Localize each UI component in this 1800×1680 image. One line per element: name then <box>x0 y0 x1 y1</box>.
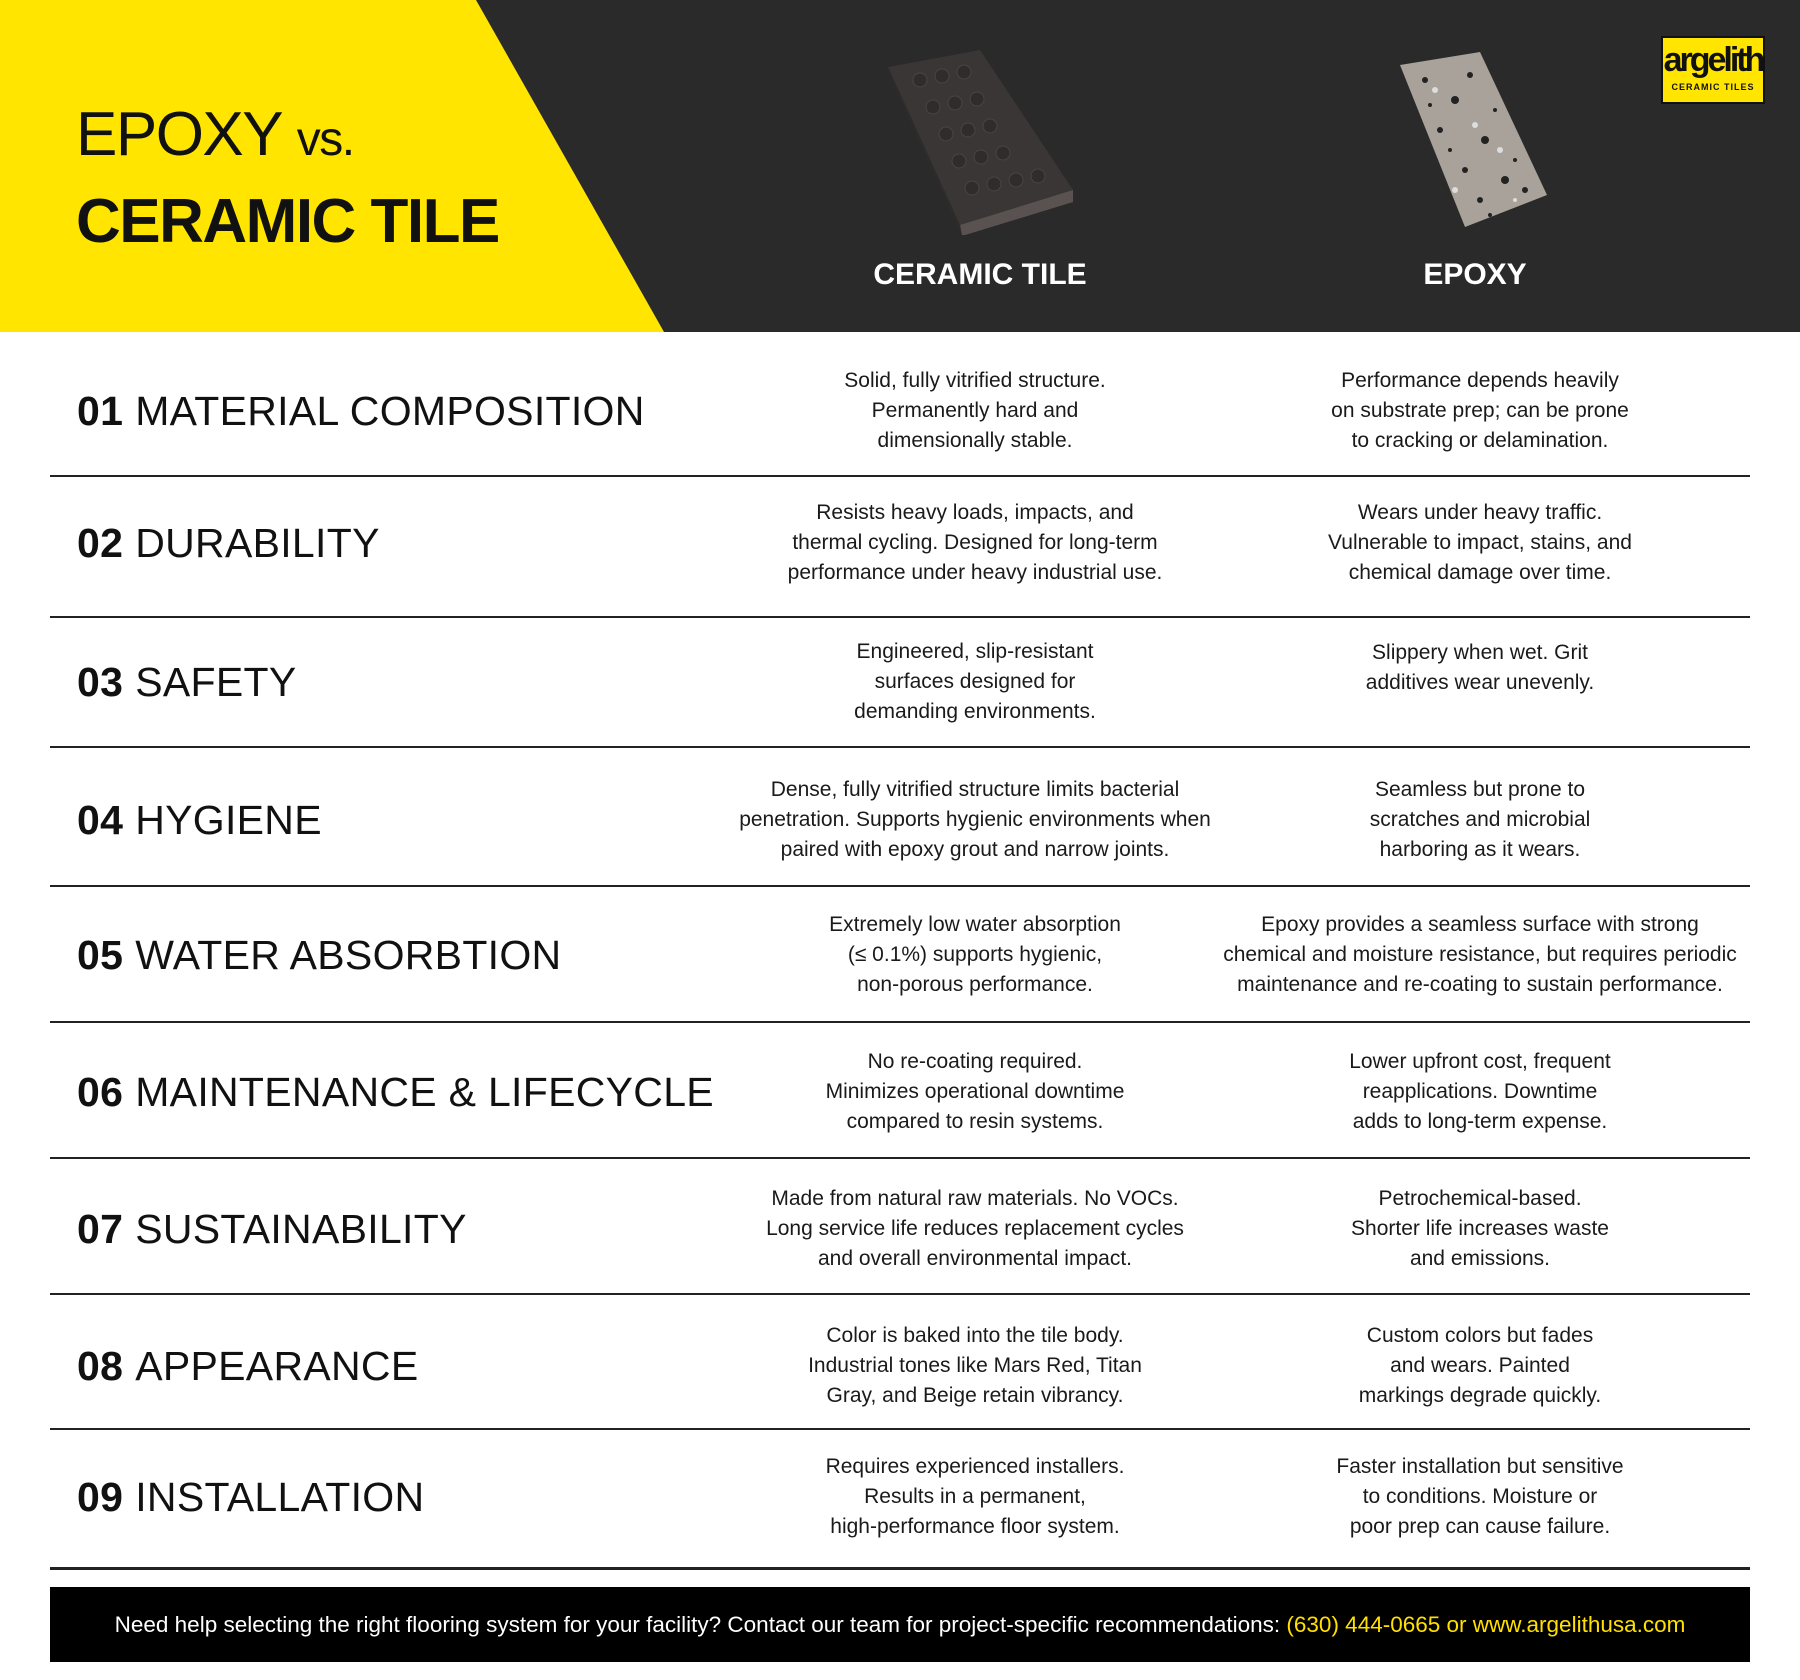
row 04: scratches and microbial <box>1370 808 1590 831</box>
row 07: SUSTAINABILITY <box>135 1206 467 1252</box>
row 06: compared to resin systems. <box>847 1110 1103 1133</box>
row 01: dimensionally stable. <box>878 429 1072 452</box>
row 09: Results in a permanent, <box>864 1485 1086 1508</box>
row 09: Requires experienced installers. <box>826 1455 1124 1478</box>
row 06: Lower upfront cost, frequent <box>1349 1050 1611 1073</box>
row 07 <box>77 1187 1609 1270</box>
row 09: high-performance floor system. <box>830 1515 1120 1538</box>
row 02: performance under heavy industrial use. <box>788 561 1162 584</box>
row 06: MAINTENANCE & LIFECYCLE <box>135 1068 714 1114</box>
title <box>76 100 499 256</box>
row 06: adds to long-term expense. <box>1353 1110 1607 1133</box>
row 03: Engineered, slip-resistant <box>857 640 1093 663</box>
row 03: Slippery when wet. Grit <box>1372 641 1588 664</box>
row 07: 07 <box>77 1206 123 1252</box>
row 09: INSTALLATION <box>135 1474 424 1520</box>
title: EPOXY vs. <box>76 100 354 169</box>
row 05: 05 <box>77 932 123 978</box>
row 09 <box>77 1455 1624 1538</box>
row 01: MATERIAL COMPOSITION <box>135 388 645 434</box>
row 05: non-porous performance. <box>857 973 1093 996</box>
row 06: reapplications. Downtime <box>1363 1080 1597 1103</box>
row 09: Faster installation but sensitive <box>1336 1455 1624 1478</box>
row 01: Performance depends heavily <box>1341 369 1619 392</box>
row 02: Resists heavy loads, impacts, and <box>816 501 1134 524</box>
row 09: 09 <box>77 1474 123 1520</box>
row 03 <box>77 640 1594 723</box>
row 02: chemical damage over time. <box>1349 561 1611 584</box>
row 06: No re-coating required. <box>868 1050 1082 1073</box>
row 04: HYGIENE <box>135 796 322 842</box>
row 01: to cracking or delamination. <box>1352 429 1608 452</box>
row 02: Wears under heavy traffic. <box>1358 501 1602 524</box>
row 07: Long service life reduces replacement cycles <box>766 1217 1184 1240</box>
row 04: Dense, fully vitrified structure limits bacterial <box>771 778 1179 801</box>
row 05: (≤ 0.1%) supports hygienic, <box>848 943 1102 966</box>
row 01: 01 <box>77 388 123 434</box>
row 03: SAFETY <box>135 658 296 704</box>
row 03: additives wear unevenly. <box>1366 671 1594 694</box>
row 04 <box>77 778 1590 861</box>
row 09: poor prep can cause failure. <box>1350 1515 1610 1538</box>
row 01: on substrate prep; can be prone <box>1331 399 1629 422</box>
row 09: to conditions. Moisture or <box>1363 1485 1597 1508</box>
icon: ceramic tile image <box>888 50 1073 235</box>
row 07: Petrochemical-based. <box>1378 1187 1582 1210</box>
row 01: Permanently hard and <box>872 399 1078 422</box>
row 03: 03 <box>77 658 123 704</box>
column heading: epoxy: EPOXY <box>1423 258 1527 291</box>
row 02: DURABILITY <box>135 520 380 566</box>
row 08: Industrial tones like Mars Red, Titan <box>808 1354 1142 1377</box>
row 05: WATER ABSORBTION <box>135 932 561 978</box>
row 05: maintenance and re-coating to sustain performance. <box>1237 973 1723 996</box>
row 06: 06 <box>77 1068 123 1114</box>
column heading: ceramic tile: CERAMIC TILE <box>873 258 1087 291</box>
row 08: Gray, and Beige retain vibrancy. <box>827 1384 1123 1407</box>
row 02: thermal cycling. Designed for long-term <box>792 531 1158 554</box>
row 04: paired with epoxy grout and narrow joints. <box>781 838 1169 861</box>
row 04: penetration. Supports hygienic environments when <box>739 808 1211 831</box>
row 05: chemical and moisture resistance, but requires periodic <box>1223 943 1737 966</box>
row 06: Minimizes operational downtime <box>826 1080 1124 1103</box>
footer callout: (630) 444-0665 or www.argelithusa.com <box>1286 1612 1685 1636</box>
row 03: demanding environments. <box>854 700 1096 723</box>
row 03: surfaces designed for <box>875 670 1075 693</box>
header yellow wedge <box>0 0 664 332</box>
row 08: 08 <box>77 1342 123 1388</box>
header background <box>0 0 1800 332</box>
title: CERAMIC TILE <box>76 187 499 256</box>
row 02: 02 <box>77 520 123 566</box>
row 07: and overall environmental impact. <box>818 1247 1132 1270</box>
row 05: Epoxy provides a seamless surface with strong <box>1261 913 1699 936</box>
footer callout: Need help selecting the right flooring system for your facility? Contact our team for project-specific recommendations: <box>115 1612 1280 1636</box>
row 05 <box>77 913 1737 996</box>
row 02: Vulnerable to impact, stains, and <box>1328 531 1632 554</box>
row 04: 04 <box>77 796 123 842</box>
row 08: markings degrade quickly. <box>1359 1384 1601 1407</box>
row 08: Color is baked into the tile body. <box>826 1324 1124 1347</box>
row 07: Shorter life increases waste <box>1351 1217 1609 1240</box>
row 01: Solid, fully vitrified structure. <box>844 369 1106 392</box>
row 07: and emissions. <box>1410 1247 1550 1270</box>
row 05: Extremely low water absorption <box>829 913 1121 936</box>
row 06 <box>77 1050 1611 1133</box>
row 04: harboring as it wears. <box>1380 838 1580 861</box>
icon: epoxy sample image <box>1400 52 1547 227</box>
row 08: Custom colors but fades <box>1367 1324 1593 1347</box>
row 08 <box>77 1324 1601 1407</box>
row 02 <box>77 501 1632 584</box>
row 01 <box>77 369 1629 452</box>
logo: argelith <box>1664 41 1762 79</box>
row 04: Seamless but prone to <box>1375 778 1585 801</box>
row 07: Made from natural raw materials. No VOCs. <box>771 1187 1179 1210</box>
logo: CERAMIC TILES <box>1671 82 1754 92</box>
footer callout <box>50 1587 1750 1662</box>
row 08: and wears. Painted <box>1390 1354 1570 1377</box>
logo <box>1661 36 1765 104</box>
row 08: APPEARANCE <box>135 1342 418 1388</box>
